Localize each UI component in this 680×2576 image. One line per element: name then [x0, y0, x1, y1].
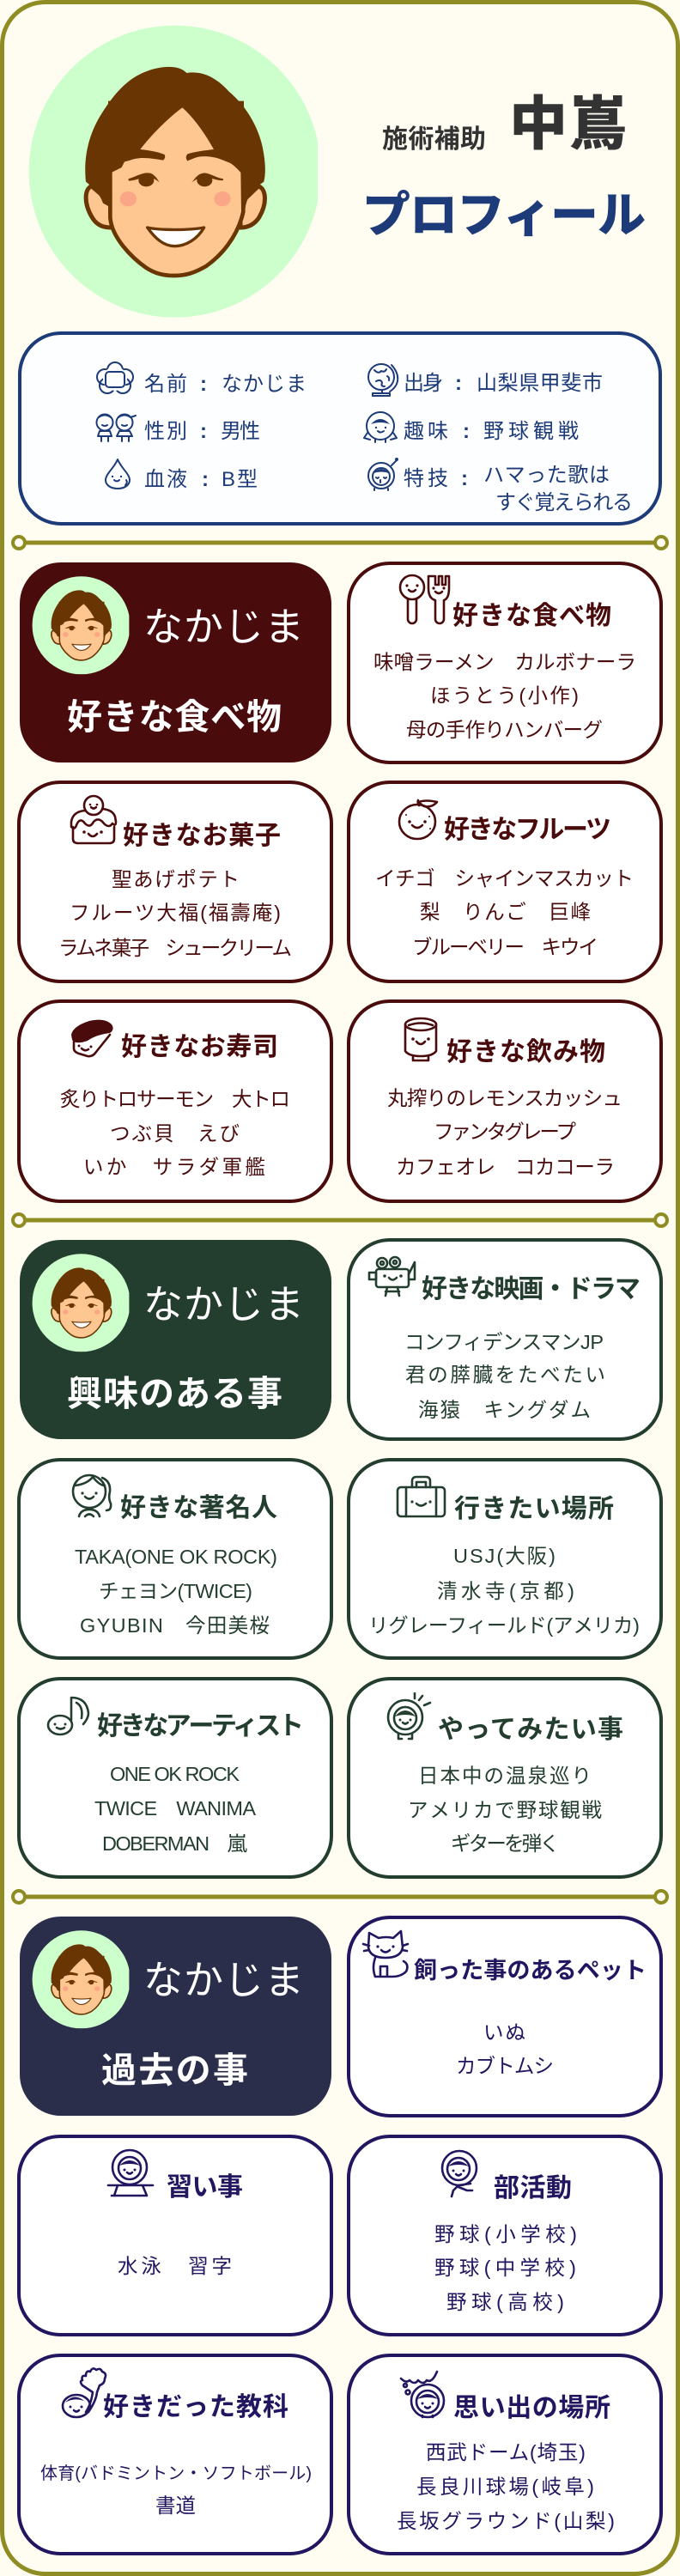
list: いぬ	[483, 2021, 525, 2044]
list: 西武ドーム(埼玉)	[426, 2441, 586, 2464]
panel: basic info	[20, 333, 660, 524]
list	[94, 1763, 256, 1855]
skill row: ハマった歌は	[483, 464, 610, 487]
list: リグレーフィールド(アメリカ)	[368, 1614, 640, 1637]
panel: favorite fruit	[349, 782, 661, 981]
list: ギターを弾く	[451, 1832, 560, 1855]
heading: 好きなフルーツ	[444, 816, 611, 844]
portrait avatar	[29, 26, 321, 318]
divider	[13, 537, 667, 549]
heading: 好きだった教科	[103, 2393, 288, 2421]
list	[373, 651, 636, 741]
list: アメリカで野球観戦	[408, 1799, 603, 1821]
list	[387, 1087, 622, 1178]
divider	[13, 1891, 667, 1903]
hobby row: 趣味	[404, 420, 448, 443]
hobby row: 野球観戦	[483, 420, 579, 443]
blood type row: :	[202, 468, 209, 491]
heading: 好きなお菓子	[123, 822, 281, 850]
list: 長坂グラウンド(山梨)	[397, 2510, 615, 2532]
gender row: 性別	[144, 420, 187, 443]
birthplace row	[404, 372, 603, 395]
icon: child studying	[108, 2150, 153, 2196]
list: つぶ貝 えび	[110, 1122, 240, 1145]
title: staff role and name	[382, 92, 627, 157]
panel: favorite food	[349, 563, 661, 762]
title: staff role and name: 中嶌	[509, 92, 627, 157]
gender row: 男性	[221, 420, 260, 443]
list: コンフィデンスマンJP	[404, 1331, 604, 1353]
heading: 好きなお寿司	[121, 1033, 278, 1061]
panel: places to visit	[349, 1460, 661, 1658]
list: チェヨン(TWICE)	[99, 1580, 252, 1602]
divider	[13, 1214, 667, 1226]
list: 野球(小学校)	[434, 2223, 577, 2245]
birthplace row: :	[455, 372, 462, 395]
list: 味噌ラーメン カルボナーラ	[373, 651, 636, 673]
icon: globe	[368, 364, 398, 396]
heading: 習い事	[167, 2173, 243, 2202]
list	[375, 867, 634, 958]
list: 長良川球場(岐阜)	[416, 2476, 594, 2498]
icon: music note	[48, 1698, 88, 1735]
heading: 好きな飲み物	[446, 1038, 605, 1066]
heading: やってみたい事	[438, 1716, 623, 1744]
skill row	[404, 464, 610, 490]
blood type row: 血液	[144, 468, 187, 491]
list: 炙りトロサーモン 大トロ	[60, 1088, 290, 1110]
panel: lessons	[19, 2136, 331, 2335]
list	[60, 1088, 290, 1178]
heading: 好きな映画・ドラマ	[422, 1275, 641, 1303]
icon: singing head	[368, 458, 398, 490]
panel: favorite sweets	[19, 782, 331, 981]
list: TWICE WANIMA	[94, 1797, 256, 1820]
list	[434, 2223, 577, 2313]
heading: 好きな著名人	[120, 1494, 277, 1522]
list: ラムネ菓子 シュークリーム	[58, 937, 292, 959]
icon: child with idea	[388, 1693, 430, 1739]
list	[58, 868, 292, 959]
heading: 好きな食べ物	[452, 602, 611, 630]
panel: favorite subjects	[19, 2355, 331, 2554]
gender row	[144, 420, 260, 443]
panel: pets	[349, 1917, 661, 2116]
nickname: なかじま	[143, 1958, 304, 2002]
heading: 好きなアーティスト	[97, 1712, 304, 1741]
section: past	[19, 1917, 661, 2554]
list: 海猿 キングダム	[418, 1399, 591, 1421]
list: 丸搾りのレモンスカッシュ	[387, 1087, 622, 1109]
list: 水泳 習字	[118, 2255, 232, 2277]
list: 野球(高校)	[446, 2291, 564, 2313]
list: いか サラダ軍艦	[83, 1156, 265, 1178]
icon: spoon and fork	[400, 575, 449, 623]
list: TAKA(ONE OK ROCK)	[75, 1546, 277, 1568]
title: staff role and name: 施術補助	[382, 125, 486, 154]
heading: profile: プロフィール	[362, 188, 646, 242]
list: USJ(大阪)	[453, 1545, 556, 1567]
list: カフェオレ コカコーラ	[396, 1156, 615, 1178]
list: ほうとう(小作)	[430, 684, 579, 707]
icon: running child	[442, 2151, 477, 2196]
avatar	[33, 1930, 131, 2028]
icon: cat	[363, 1931, 408, 1977]
panel: favorite artists	[19, 1679, 331, 1877]
skill row: :	[461, 467, 468, 490]
list	[397, 2441, 615, 2532]
list: GYUBIN 今田美桜	[80, 1614, 270, 1637]
panel: favorite celebrities	[19, 1460, 331, 1658]
panel: memorable places	[349, 2355, 661, 2554]
nickname: なかじま	[143, 605, 304, 649]
list: 梨 りんご 巨峰	[420, 901, 591, 923]
list: ファンタグレープ	[434, 1121, 577, 1143]
list: 書道	[155, 2494, 196, 2517]
birthplace row: 山梨県甲斐市	[477, 372, 603, 395]
skill row continued: すぐ覚えられる	[495, 491, 633, 514]
list	[40, 2464, 312, 2517]
panel: section header	[20, 1240, 331, 1439]
section title: 好きな食べ物	[67, 697, 282, 737]
heading: 飼った事のあるペット	[414, 1958, 647, 1984]
panel: section header	[20, 1917, 331, 2116]
icon: suitcase	[398, 1477, 445, 1516]
list	[75, 1546, 277, 1637]
birthplace row: 出身	[404, 372, 443, 395]
section: interests	[19, 1240, 661, 1877]
blood type row: B型	[222, 468, 258, 491]
hobby row: :	[463, 420, 470, 443]
list: ONE OK ROCK	[110, 1763, 240, 1785]
list: 君の膵臓をたべたい	[405, 1364, 605, 1386]
list	[404, 1331, 605, 1421]
list: 清水寺(京都)	[437, 1580, 574, 1602]
name row	[144, 373, 307, 396]
icon: sushi	[71, 1020, 113, 1056]
panel: club activities	[349, 2136, 661, 2335]
icon: cake	[71, 796, 116, 843]
list: 日本中の温泉巡り	[418, 1765, 592, 1787]
panel: favorite movies and dramas	[349, 1240, 661, 1439]
section title: 過去の事	[101, 2050, 248, 2090]
icon: movie camera	[369, 1257, 415, 1296]
avatar	[33, 1254, 131, 1352]
list: 野球(中学校)	[434, 2257, 576, 2279]
heading: 行きたい場所	[454, 1495, 614, 1523]
panel: section header	[20, 562, 331, 762]
icon: raised hand	[63, 2368, 106, 2417]
list: 母の手作りハンバーグ	[406, 719, 603, 741]
name row: なかじま	[222, 373, 307, 396]
list: 聖あげポテト	[112, 868, 240, 890]
icon: flower	[97, 362, 133, 393]
list	[456, 2021, 554, 2077]
list: イチゴ シャインマスカット	[375, 867, 634, 890]
blood type row	[144, 468, 258, 491]
list: ブルーベリー キウイ	[412, 936, 598, 958]
icon: woman	[73, 1475, 111, 1516]
heading: 部活動	[494, 2174, 572, 2202]
panel: favorite sushi	[19, 1001, 331, 1201]
icon: cup	[405, 1018, 436, 1060]
skill row: 特技	[404, 467, 448, 490]
gender row: :	[200, 420, 207, 443]
name row: :	[200, 373, 207, 396]
panel: things to try	[349, 1679, 661, 1877]
list	[368, 1545, 640, 1637]
section title: 興味のある事	[67, 1374, 282, 1413]
avatar	[33, 576, 131, 674]
heading: 思い出の場所	[453, 2394, 610, 2422]
list: 体育(バドミントン・ソフトボール)	[40, 2464, 312, 2483]
list: フルーツ大福(福壽庵)	[70, 902, 281, 924]
nickname: なかじま	[143, 1282, 304, 1327]
list	[408, 1765, 603, 1855]
icon: children	[96, 414, 136, 441]
hobby row	[404, 420, 579, 443]
icon: hobby girl	[364, 412, 397, 442]
list: カブトムシ	[456, 2055, 554, 2077]
icon: daydreaming child	[401, 2372, 444, 2417]
list: DOBERMAN 嵐	[102, 1832, 247, 1855]
section: favorite foods	[19, 562, 661, 1201]
panel: favorite drinks	[349, 1001, 661, 1201]
icon: mandarin orange	[399, 800, 437, 839]
icon: water drop	[106, 459, 130, 489]
name row: 名前	[144, 373, 187, 396]
